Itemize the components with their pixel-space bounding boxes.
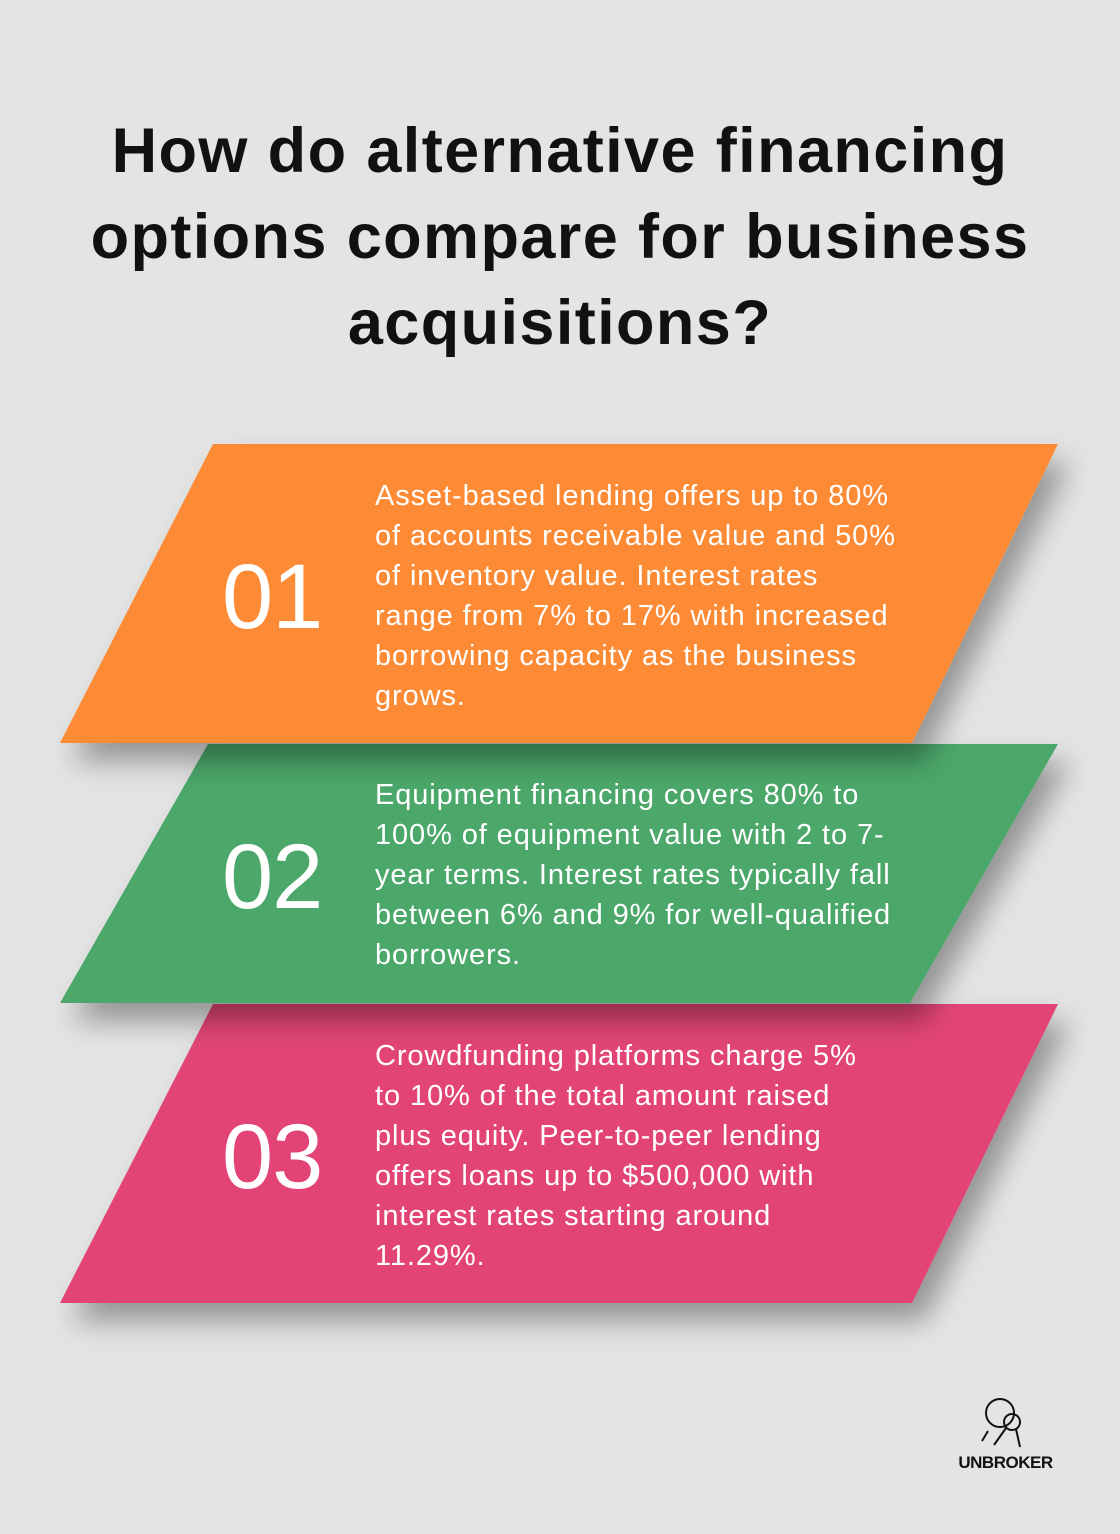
text 03: plus equity. Peer-to-peer lending [375, 1120, 822, 1152]
panel: 03 pink [60, 1004, 1058, 1303]
title: acquisitions? [348, 288, 772, 358]
text 03: 11.29%. [375, 1240, 486, 1272]
text 01: borrowing capacity as the business [375, 640, 857, 672]
text 02: between 6% and 9% for well-qualified [375, 899, 891, 931]
number 02: 02 [222, 826, 322, 928]
title: options compare for business [91, 202, 1029, 272]
text 02: 100% of equipment value with 2 to 7- [375, 819, 885, 851]
text 02: year terms. Interest rates typically fall [375, 859, 891, 891]
text 02: Equipment financing covers 80% to [375, 779, 859, 811]
text 03: offers loans up to $500,000 with [375, 1160, 814, 1192]
text 01: grows. [375, 680, 466, 712]
text 01: of accounts receivable value and 50% [375, 520, 896, 552]
icon: keys [981, 1398, 1021, 1448]
panel: 02 green [60, 744, 1058, 1003]
number 01: 01 [222, 546, 322, 648]
text 01: Asset-based lending offers up to 80% [375, 480, 889, 512]
number 03: 03 [222, 1106, 322, 1208]
text 03: Crowdfunding platforms charge 5% [375, 1040, 857, 1072]
text 02: borrowers. [375, 939, 521, 971]
text 01 [375, 480, 896, 712]
logo text: UNBROKER [958, 1453, 1053, 1472]
title [91, 116, 1029, 358]
text 03: interest rates starting around [375, 1200, 771, 1232]
text 03: to 10% of the total amount raised [375, 1080, 830, 1112]
text 01: range from 7% to 17% with increased [375, 600, 888, 632]
title: How do alternative financing [112, 116, 1008, 186]
text 02 [375, 779, 891, 971]
text 01: of inventory value. Interest rates [375, 560, 818, 592]
logo [958, 1398, 1053, 1472]
text 03 [375, 1040, 857, 1272]
panel: 01 orange [60, 444, 1058, 743]
